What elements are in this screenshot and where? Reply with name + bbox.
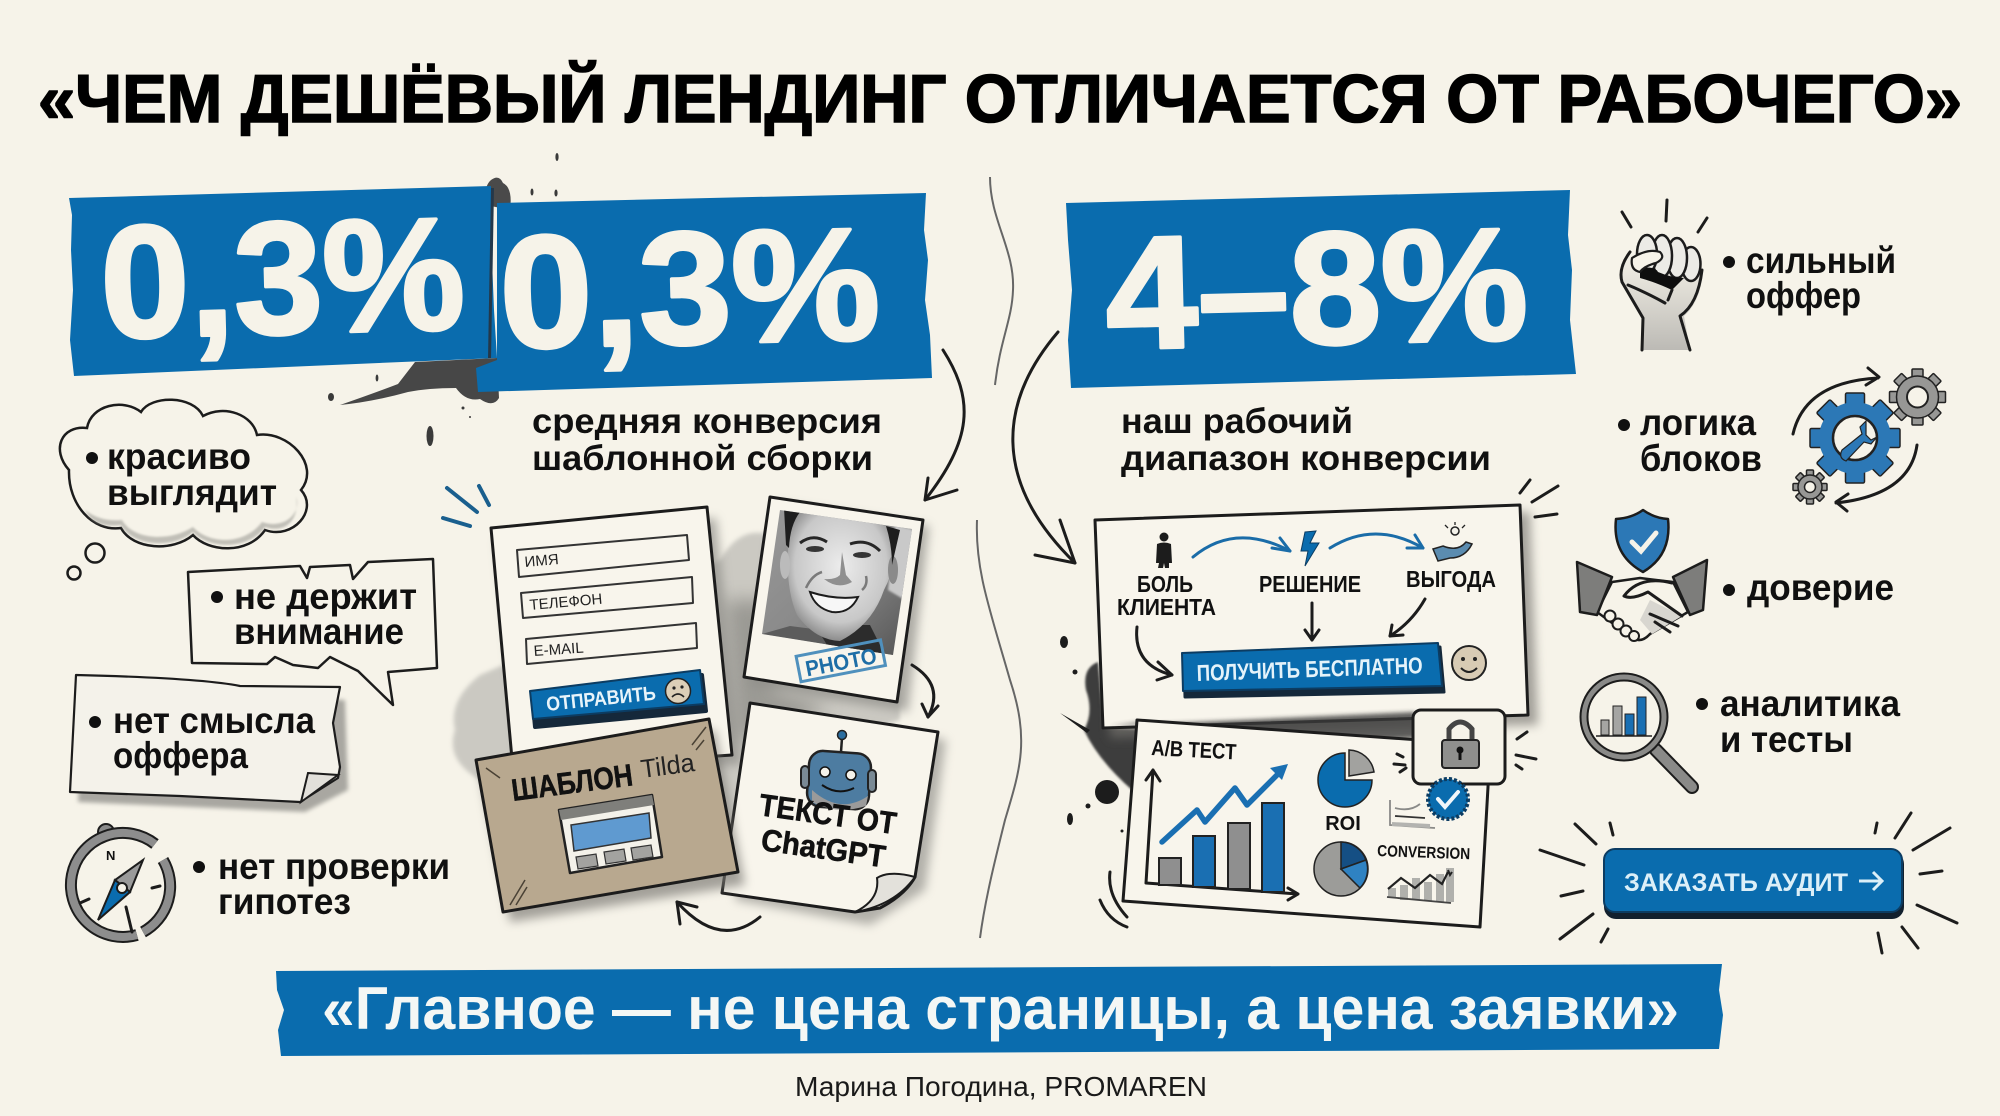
blue ticks near form (443, 486, 489, 526)
item: block logic (1618, 402, 1762, 479)
pie chart: ROI (1318, 750, 1374, 807)
icon: smiley (1452, 646, 1486, 680)
arrow: photo to sticky (912, 665, 938, 717)
tan template card: ШАБЛОН (509, 757, 635, 808)
item: no hypothesis testing (193, 846, 450, 922)
rays around audit button (1540, 813, 1957, 953)
ink splatter: right side (1060, 636, 1150, 832)
field: name (517, 535, 689, 577)
top page card: logic flow: ВЫГОДА (1406, 566, 1496, 592)
pie chart: shares (1314, 842, 1368, 896)
cloud bubble: looks pretty (60, 400, 307, 580)
field: phone: ТЕЛЕФОН (529, 591, 603, 614)
icon: hand with bulb (1433, 522, 1472, 561)
item: analytics and tests: аналитика (1720, 683, 1900, 724)
arrow: sticky back to template (677, 902, 760, 930)
arrow: pain to solution (1193, 538, 1290, 557)
item: analytics and tests (1696, 683, 1900, 760)
caption: average conversion (532, 402, 882, 478)
button: send with sad face (530, 670, 706, 727)
tape: first 0,3%: 0,3% (98, 184, 467, 372)
button: send with sad face: ОТПРАВИТЬ (545, 683, 657, 716)
icon: magnifier with bars (1584, 677, 1692, 787)
icon: padlock (1442, 722, 1479, 768)
icon: gears (1793, 368, 1946, 511)
item: block logic: блоков (1640, 438, 1762, 479)
field: email (526, 623, 697, 664)
stamp: PHOTO: PHOTO (803, 643, 879, 681)
gear: large blue (1810, 393, 1900, 483)
icon: shield and handshake (1577, 510, 1707, 641)
lock sparkle ticks (1394, 732, 1536, 772)
cloud bubble: looks pretty: выглядит (107, 472, 277, 513)
top page card: logic flow (1095, 505, 1538, 738)
card shadow wedge (1110, 712, 1415, 745)
arrows: to call to action (1137, 599, 1425, 680)
arrow: solution to benefit (1330, 534, 1423, 548)
bottom tape: quote (276, 964, 1723, 1056)
caption: working range (1121, 402, 1491, 478)
caption: working range: диапазон конверсии (1121, 439, 1491, 478)
gear: small grey (1793, 470, 1827, 504)
analytics card: CONVERSION (1377, 843, 1470, 863)
item: no hypothesis testing: нет проверки (218, 846, 450, 887)
item: strong offer: оффер (1746, 275, 1861, 316)
item: strong offer: сильный (1746, 240, 1896, 281)
arrow: tape to template collage (925, 350, 964, 500)
icon: person (1156, 532, 1172, 568)
field: name: ИМЯ (524, 551, 559, 571)
divider: upper curve (990, 177, 1013, 385)
item: strong offer (1723, 240, 1896, 316)
caption: average conversion: шаблонной сборки (532, 439, 873, 478)
title: «ЧЕМ ДЕШЁВЫЙ ЛЕНДИНГ ОТЛИЧАЕТСЯ ОТ РАБОЧЕГО» (38, 60, 1962, 137)
polaroid photo (744, 497, 929, 712)
icon: fist (1621, 200, 1707, 350)
top page card: logic flow: РЕШЕНИЕ (1259, 571, 1361, 597)
item: no hypothesis testing: гипотез (218, 881, 351, 922)
field: phone (521, 577, 693, 618)
icon: lightning (1301, 531, 1319, 566)
bar chart (1146, 764, 1298, 900)
sticky note: ChatGPT text: ChatGPT (759, 822, 888, 874)
sticky note: ChatGPT text: ТЕКСТ ОТ (757, 787, 899, 841)
divider: lower curve (977, 520, 1021, 938)
icon: compass (71, 824, 170, 937)
field: email: E-MAIL (533, 640, 584, 660)
icon: browser window (559, 795, 662, 873)
note: no offer meaning (70, 675, 348, 812)
callout: doesn't hold attention: внимание (234, 611, 404, 652)
lock card (1413, 710, 1505, 784)
mini chart: conversion (1387, 868, 1452, 903)
item: trust: доверие (1747, 567, 1894, 608)
ink splatter: behind tapes (328, 153, 559, 446)
scribble arcs: bottom left (1100, 872, 1127, 927)
top page card: logic flow: КЛИЕНТА (1117, 594, 1216, 620)
button: get for free (1182, 643, 1444, 697)
analytics card: A/B ТЕСТ (1151, 735, 1237, 764)
form card (491, 507, 742, 770)
button: get for free: ПОЛУЧИТЬ БЕСПЛАТНО (1196, 652, 1423, 686)
tan template card (476, 719, 745, 922)
caption: average conversion: средняя конверсия (532, 402, 882, 441)
analytics card: ROI (1325, 813, 1361, 835)
item: analytics and tests: и тесты (1720, 719, 1853, 760)
footer credit: Марина Погодина, PROMAREN (795, 1071, 1207, 1102)
analytics card (1123, 720, 1490, 927)
tape: 4-8%: 4–8% (1103, 194, 1530, 383)
item: block logic: логика (1640, 402, 1756, 443)
note: no offer meaning: нет смысла (113, 700, 315, 741)
tan template card: Tilda (639, 747, 697, 784)
badge: verified check (1428, 779, 1468, 819)
top page card: logic flow: БОЛЬ (1137, 571, 1193, 597)
bottom tape: quote: «Главное — не цена страницы, а цена заявки» (322, 975, 1679, 1042)
arrow: tape to working page (1013, 332, 1075, 563)
button: order audit: ЗАКАЗАТЬ АУДИТ (1624, 869, 1848, 897)
caption: working range: наш рабочий (1121, 402, 1353, 441)
ticks: top right of card (1520, 480, 1558, 517)
button: order audit (1604, 849, 1904, 919)
icon: compass: N (106, 848, 115, 863)
watercolor wash (453, 533, 900, 870)
cloud bubble: looks pretty: красиво (107, 436, 251, 477)
mini chart: blurred lines (1390, 800, 1435, 828)
callout: doesn't hold attention: не держит (234, 576, 417, 617)
callout: doesn't hold attention (188, 559, 437, 705)
sticky note: ChatGPT text (722, 703, 946, 925)
icon: robot (801, 730, 876, 810)
gear: top grey (1890, 369, 1946, 425)
tape: second 0,3%: 0,3% (497, 194, 882, 382)
photo: smiling man (762, 510, 912, 655)
note: no offer meaning: оффера (113, 735, 248, 776)
